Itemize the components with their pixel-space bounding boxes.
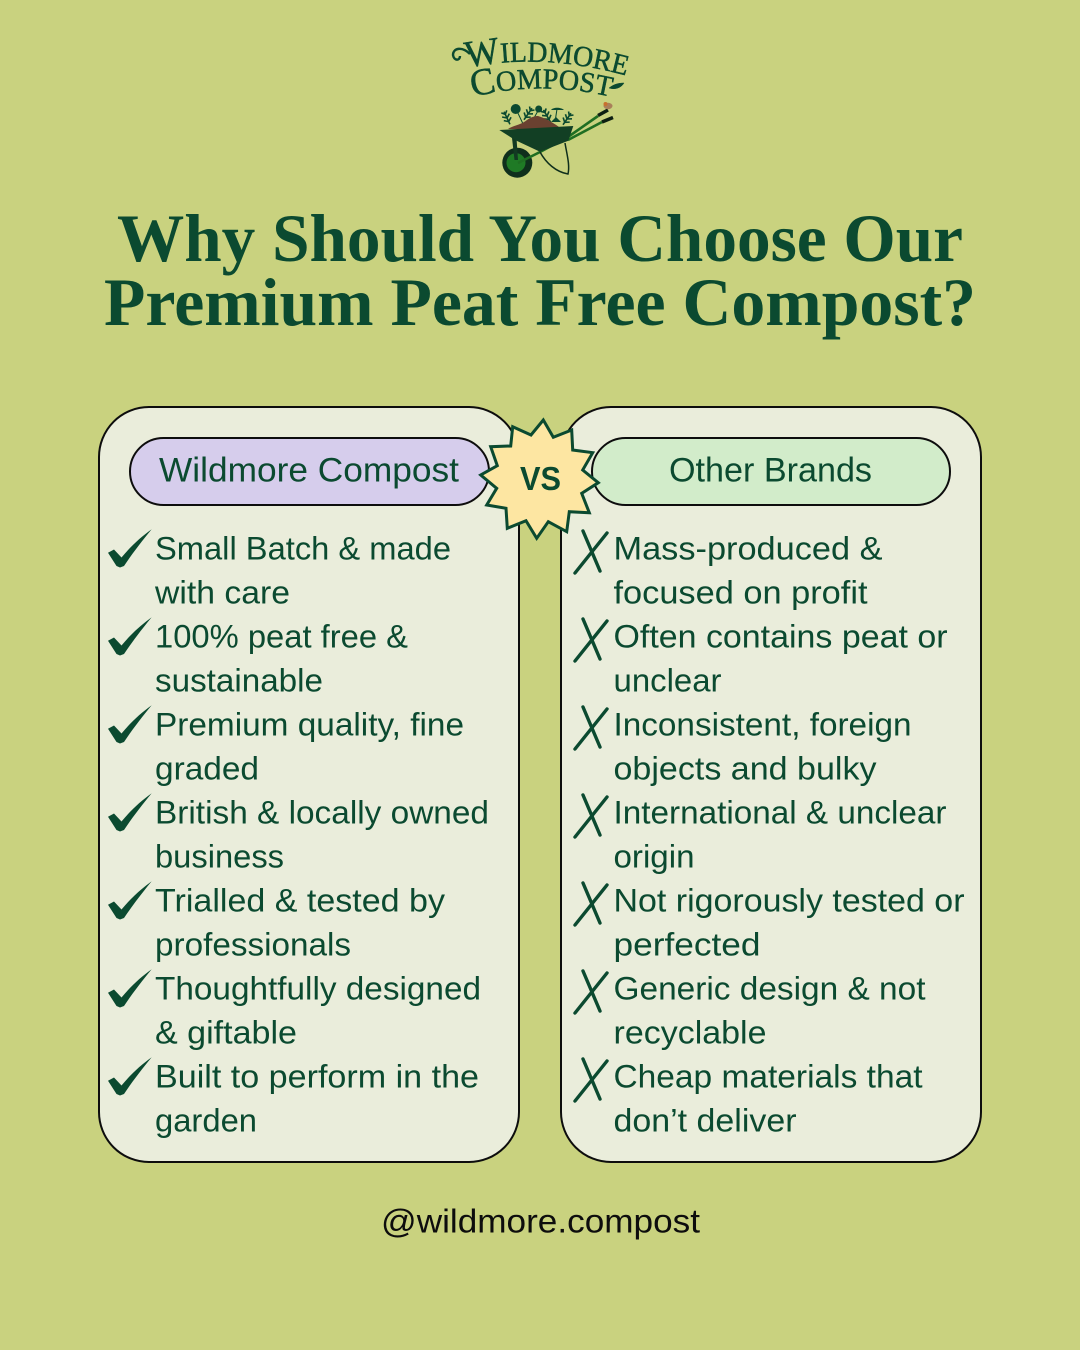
Other Brands drawbacks list: don’t deliver [614, 1102, 797, 1138]
panel: Wildmore Compost [99, 407, 519, 1162]
Wildmore benefits list: Trialled & tested by [155, 882, 445, 918]
Wildmore benefits list: graded [155, 750, 259, 786]
pill heading: Wildmore Compost: Wildmore Compost [159, 452, 460, 490]
check icons [108, 529, 152, 1096]
logo wordmark: COMPOST [471, 68, 614, 96]
Other Brands drawbacks list: Inconsistent, foreign [614, 706, 912, 742]
VS starburst badge: VS [520, 460, 561, 497]
Wildmore benefits list: Premium quality, fine [155, 706, 464, 742]
Other Brands drawbacks list: perfected [614, 926, 760, 962]
logo: Wildmore Compost [452, 38, 629, 178]
Other Brands drawbacks list: Cheap materials that [614, 1058, 923, 1094]
Wildmore benefits list: business [155, 838, 284, 874]
logo wordmark [452, 38, 629, 96]
title: Why Should You Choose Our [117, 200, 963, 276]
Other Brands drawbacks list: International & unclear [614, 794, 947, 830]
Wildmore benefits list: 100% peat free & [155, 618, 408, 654]
Wildmore benefits list: garden [155, 1102, 257, 1138]
pill heading: Wildmore Compost [130, 438, 489, 505]
title: Premium Peat Free Compost? [104, 264, 976, 340]
cross icons [575, 531, 607, 1101]
Other Brands drawbacks list: Not rigorously tested or [614, 882, 965, 918]
Wildmore benefits list [154, 530, 489, 1138]
Wildmore benefits list: & giftable [155, 1014, 297, 1050]
Wildmore benefits list: Built to perform in the [155, 1058, 479, 1094]
Wildmore benefits list: with care [154, 574, 290, 610]
Other Brands drawbacks list: Mass-produced & [614, 530, 882, 566]
pill heading: Other Brands [592, 438, 950, 505]
panel: Other Brands [561, 407, 981, 1162]
Other Brands drawbacks list: Generic design & not [614, 970, 926, 1006]
VS starburst badge [481, 420, 598, 538]
Other Brands drawbacks list: objects and bulky [614, 750, 876, 786]
Other Brands drawbacks list: unclear [614, 662, 722, 698]
footer handle: @wildmore.compost [381, 1202, 700, 1240]
Wildmore benefits list: Thoughtfully designed [155, 970, 481, 1006]
Wildmore benefits list: British & locally owned [155, 794, 489, 830]
title [104, 200, 976, 340]
Other Brands drawbacks list: Often contains peat or [614, 618, 948, 654]
Other Brands drawbacks list [614, 530, 965, 1138]
logo wordmark: WILDMORE [462, 38, 629, 76]
pill heading: Other Brands: Other Brands [669, 452, 872, 490]
Wildmore benefits list: Small Batch & made [155, 530, 451, 566]
Wildmore benefits list: sustainable [155, 662, 323, 698]
Other Brands drawbacks list: focused on profit [614, 574, 868, 610]
logo wheelbarrow illustration [499, 102, 613, 178]
Other Brands drawbacks list: recyclable [614, 1014, 766, 1050]
Wildmore benefits list: professionals [155, 926, 351, 962]
Other Brands drawbacks list: origin [614, 838, 694, 874]
